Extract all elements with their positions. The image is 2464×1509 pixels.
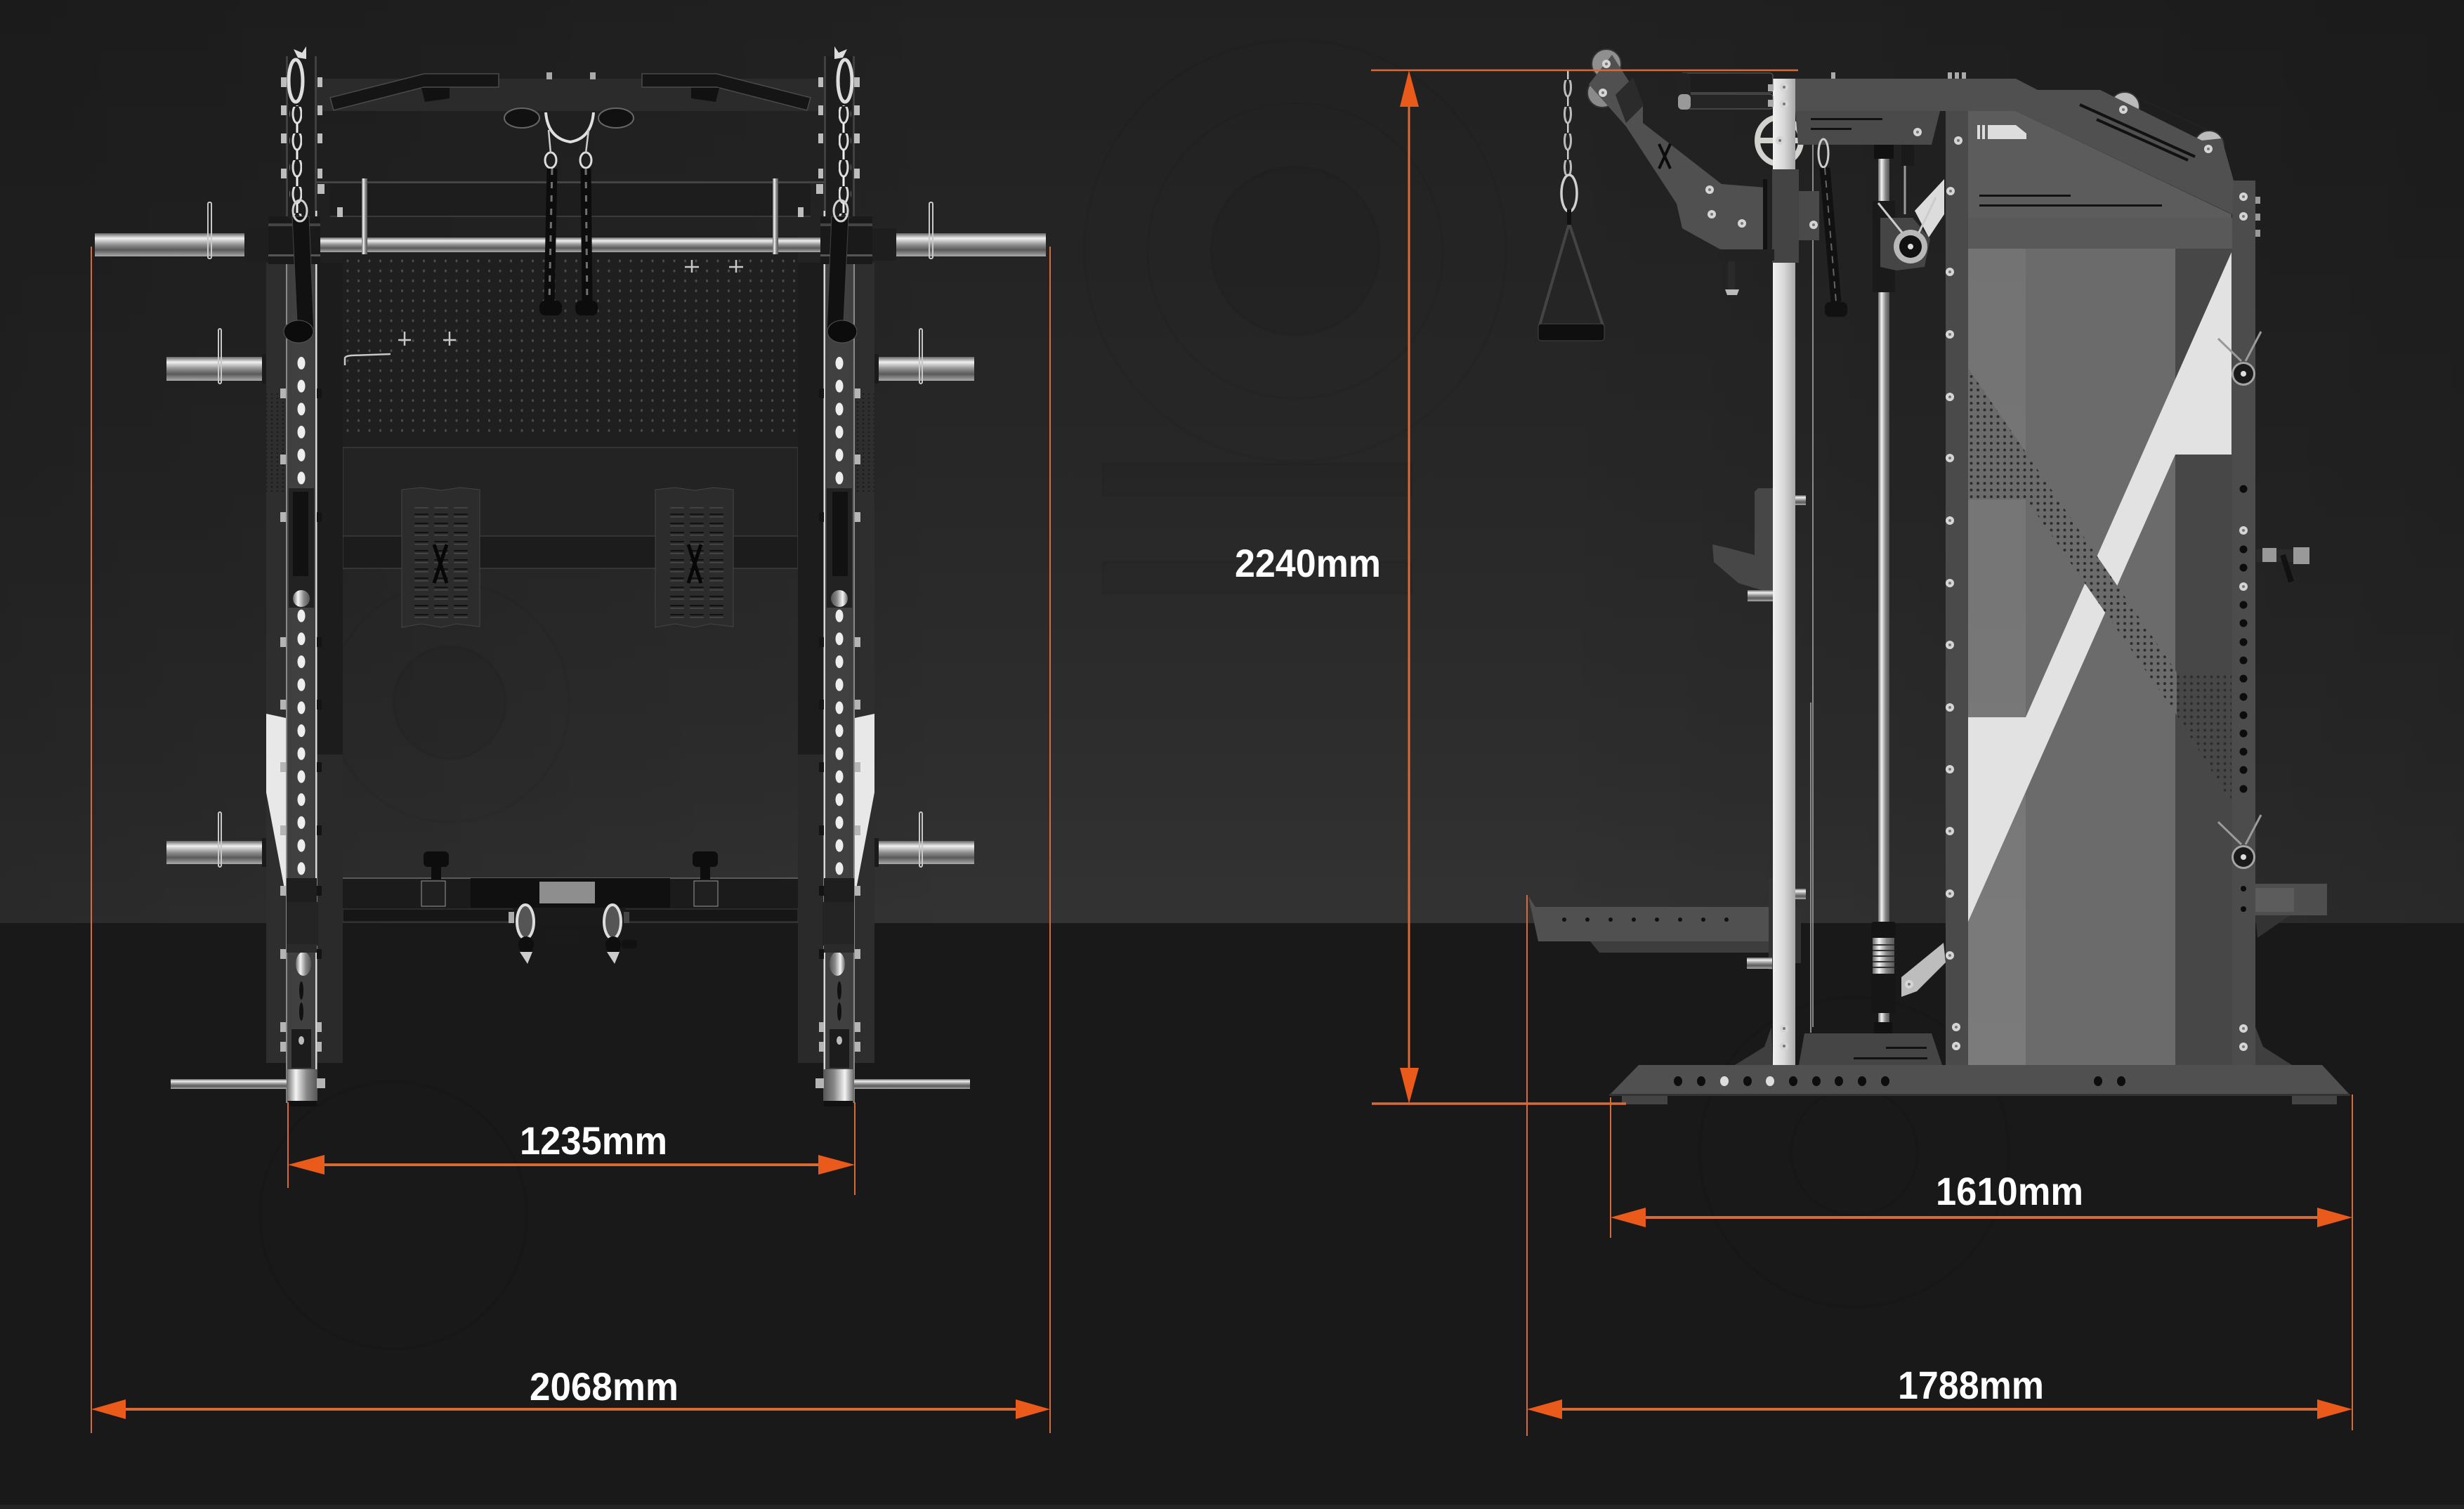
center silver block bbox=[539, 882, 595, 903]
faint background decoration bbox=[260, 40, 2009, 1349]
dimension: 1788mm: 1788mm bbox=[1898, 1363, 2044, 1407]
gussets bbox=[1735, 1027, 2292, 1065]
top crossbar bbox=[317, 79, 824, 111]
carriage plate bbox=[1880, 218, 1930, 270]
front column bbox=[1946, 111, 1968, 1065]
lower wall frame bbox=[343, 448, 798, 568]
top beam bbox=[1795, 79, 2234, 214]
triangle handle bbox=[1538, 209, 1604, 341]
lower pedal bracket bbox=[1901, 943, 1946, 997]
white lightning graphic bbox=[1968, 252, 2232, 922]
chain bbox=[1562, 71, 1573, 175]
background wall bbox=[0, 0, 2464, 923]
lower crossbar bbox=[343, 877, 798, 922]
mid rear peg bbox=[2256, 547, 2309, 582]
floor bbox=[0, 923, 2464, 1509]
front column bolts bbox=[1946, 136, 1962, 1050]
roller pads bbox=[1678, 73, 1773, 110]
rope cables bbox=[539, 169, 598, 315]
cabinet top triangle bbox=[1968, 111, 2232, 218]
spring and stopper bbox=[1871, 922, 1896, 1033]
cabinet markings bbox=[1977, 125, 2162, 207]
lower pulley box bbox=[1799, 1033, 1942, 1065]
pull-up handles bbox=[330, 72, 811, 110]
perforated diagonal band bbox=[1968, 368, 2232, 803]
rear column holes and bolts bbox=[2239, 192, 2260, 1051]
main barbell bbox=[320, 178, 820, 254]
dimension: 1788mm bbox=[1527, 895, 2352, 1436]
cabinet panel left segment bbox=[1968, 249, 2026, 1065]
arm mount bracket bbox=[1718, 169, 1819, 295]
J-hook bbox=[1712, 488, 1806, 601]
dimension: 1235mm bbox=[288, 1102, 855, 1195]
pegboard perforation bbox=[343, 236, 798, 433]
lower rear clip bbox=[2218, 815, 2261, 869]
wall side shading bbox=[0, 0, 2464, 923]
side view machine bbox=[1528, 49, 2350, 1104]
upper frame rails bbox=[317, 181, 824, 217]
rear side box bbox=[2255, 884, 2327, 938]
bottom edge strip bbox=[0, 1505, 2464, 1509]
swivel arm bbox=[1587, 49, 1767, 253]
thin cables bbox=[1811, 141, 1813, 1033]
dimension: 1610mm bbox=[1611, 1097, 2352, 1238]
top bolts bbox=[1831, 72, 1966, 79]
cabinet panel middle segment bbox=[2026, 249, 2175, 1065]
front view machine bbox=[95, 46, 1046, 1106]
upright bolts bbox=[1776, 83, 1788, 1050]
foot plate left bbox=[402, 488, 480, 627]
upper white bracket bbox=[1915, 179, 1944, 237]
carriage sleeve bbox=[1873, 145, 1914, 292]
adjustment knobs bbox=[424, 851, 718, 880]
foot plate right bbox=[655, 488, 733, 627]
wheel bbox=[1757, 117, 1801, 164]
dimension: 1610mm: 1610mm bbox=[1936, 1169, 2083, 1213]
silver upright bbox=[1773, 79, 1795, 1065]
right upright assembly bbox=[798, 46, 1046, 1106]
rear column bbox=[2232, 181, 2255, 1065]
carabiner bbox=[1561, 175, 1577, 211]
rear panel bbox=[343, 236, 798, 448]
cabinet panel right segment bbox=[2175, 249, 2232, 1065]
left upright assembly bbox=[95, 46, 343, 1106]
cabinet top band bbox=[1968, 218, 2232, 249]
rear pulleys bbox=[2110, 92, 2224, 160]
dimension: 2068mm bbox=[91, 247, 1050, 1433]
cable and carabiner bbox=[1818, 139, 1847, 317]
dimension: 2068mm: 2068mm bbox=[530, 1364, 679, 1409]
top plate bbox=[1795, 111, 1940, 145]
dimension: 1235mm: 1235mm bbox=[520, 1118, 667, 1163]
lower pulley assembly bbox=[509, 905, 637, 964]
dimension: 2240mm bbox=[1235, 70, 1798, 1104]
base plate bbox=[1609, 1065, 2350, 1104]
safety arm bbox=[1528, 878, 1806, 969]
top pulleys and cable hoop bbox=[504, 108, 634, 168]
dimension: 2240mm: 2240mm bbox=[1235, 541, 1381, 585]
pegboard hooks bbox=[345, 260, 743, 365]
upper rear clip bbox=[2218, 332, 2261, 386]
guide rod bbox=[1878, 159, 1889, 1033]
carriage clip knob bbox=[1878, 197, 1936, 263]
top slots and pulley bolts bbox=[2080, 105, 2213, 160]
